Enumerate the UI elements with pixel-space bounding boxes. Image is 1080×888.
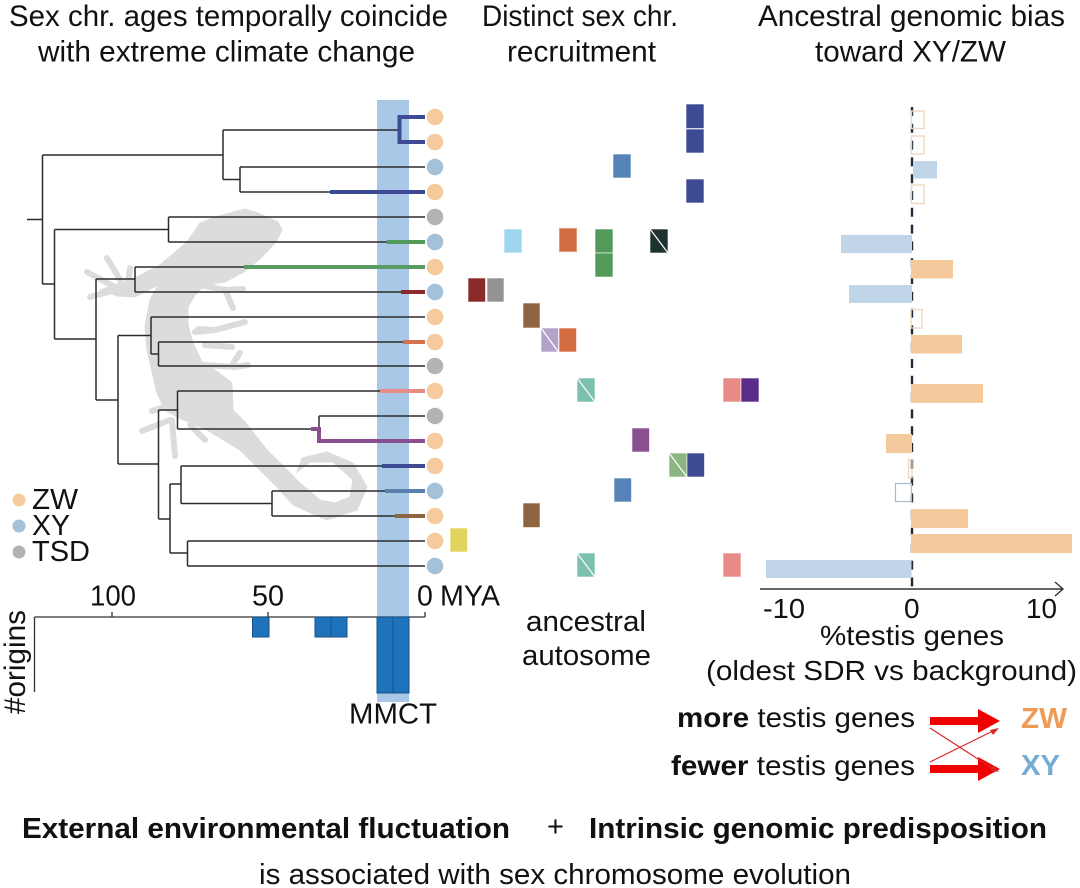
label: ancestral autosome: autosome <box>522 640 651 672</box>
diverging bar chart: testis genes: %testis genes <box>820 620 1004 651</box>
key: testis genes to sex system: ZW <box>1021 703 1068 735</box>
diverging bar chart: testis genes: 10 <box>1026 593 1057 624</box>
time axis: 0 <box>417 580 433 612</box>
legend: sex determination systems: ZW <box>32 484 79 516</box>
conclusion text: + <box>547 811 564 843</box>
time axis: 50 <box>252 580 284 612</box>
diverging bar chart: testis genes: (oldest SDR vs background) <box>706 655 1077 686</box>
panel: ancestral genomic bias <box>671 0 1077 782</box>
key: testis genes to sex system: fewer testis genes <box>671 750 915 781</box>
key: testis genes to sex system: more testis genes <box>677 702 915 733</box>
key: testis genes to sex system <box>671 702 1068 782</box>
key: testis genes to sex system: XY <box>1021 750 1060 782</box>
title: sex chromosome ages: Sex chr. ages temporally coincide <box>9 0 448 33</box>
title: distinct recruitment: recruitment <box>507 36 656 68</box>
panel: climate timing phylogeny <box>0 0 500 730</box>
legend: sex determination systems: XY <box>32 510 70 542</box>
highlighted sex chromosome branches <box>244 117 425 516</box>
time axis: 100 <box>90 580 136 612</box>
conclusion text: Intrinsic genomic predisposition <box>589 813 1047 845</box>
title: sex chromosome ages <box>9 0 448 68</box>
diverging bar chart: testis genes: -10 <box>763 593 805 624</box>
ancestral autosome blocks <box>450 104 759 577</box>
title: distinct recruitment: Distinct sex chr. <box>482 0 678 33</box>
phylogenetic tree <box>27 130 425 566</box>
title: ancestral genomic bias: Ancestral genomic bias <box>758 0 1065 33</box>
tip state circles <box>427 109 443 574</box>
MMCT highlight band <box>377 100 409 702</box>
panel: sex chromosome recruitment <box>450 0 759 672</box>
title: sex chromosome ages: with extreme climate change <box>37 36 415 68</box>
origins histogram <box>0 610 437 730</box>
diverging bar chart: testis genes: 0 <box>904 593 920 624</box>
title: distinct recruitment <box>482 0 678 68</box>
title: ancestral genomic bias <box>758 0 1065 68</box>
conclusion text <box>22 811 1047 888</box>
time axis <box>34 580 500 617</box>
label: ancestral autosome: ancestral <box>526 606 646 638</box>
legend: sex determination systems <box>12 484 90 568</box>
gecko silhouette <box>87 209 367 520</box>
title: ancestral genomic bias: toward XY/ZW <box>815 36 1006 68</box>
origins histogram: MMCT <box>349 698 437 730</box>
diverging bar chart: testis genes <box>706 107 1077 686</box>
conclusion text: External environmental fluctuation <box>22 813 510 845</box>
time axis: MYA <box>440 580 500 612</box>
label: ancestral autosome <box>522 606 651 672</box>
legend: sex determination systems: TSD <box>32 536 90 568</box>
